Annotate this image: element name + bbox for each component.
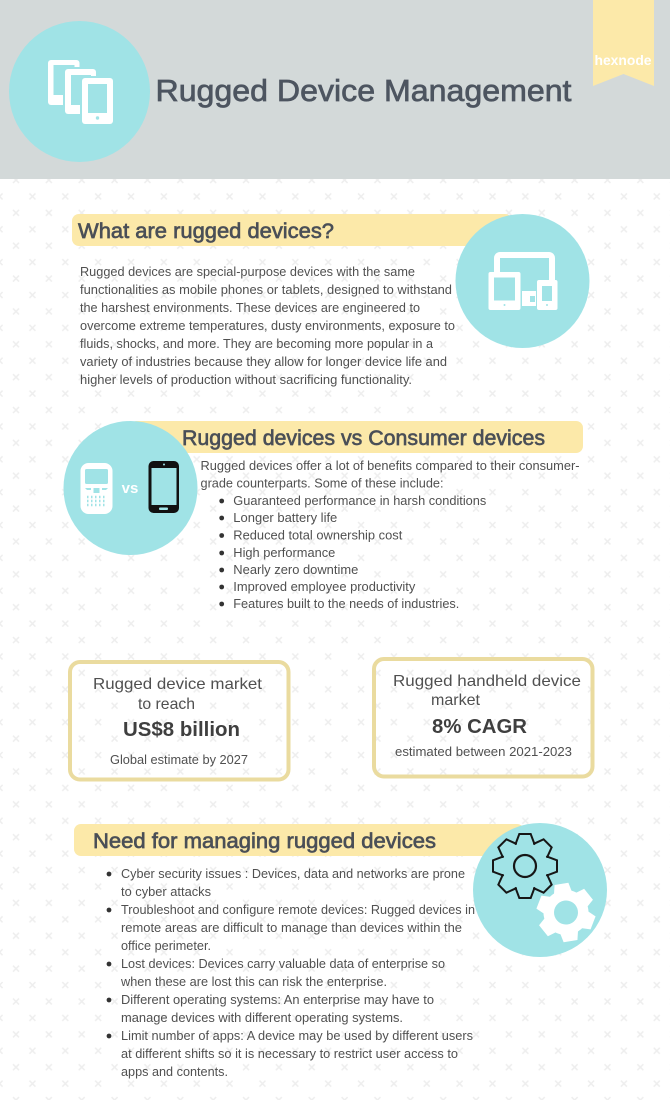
header banner bbox=[0, 0, 670, 179]
stat card: market size: to reach bbox=[138, 696, 195, 713]
list: benefits: Longer battery life bbox=[233, 510, 337, 525]
heading bar bbox=[74, 824, 524, 856]
list: reasons: at different shifts so it is necessary to restrict user access to bbox=[121, 1046, 458, 1061]
title: Rugged Device Management bbox=[156, 73, 572, 108]
section: what are rugged devices bbox=[72, 214, 590, 387]
list: benefits: Nearly zero downtime bbox=[233, 562, 358, 577]
paragraph: definition: overcome extreme temperatures, dusty environments, exposure to bbox=[80, 318, 455, 333]
list: benefits: Improved employee productivity bbox=[233, 579, 416, 594]
list: benefits: Reduced total ownership cost bbox=[233, 528, 403, 542]
stat card: CAGR bbox=[374, 659, 592, 776]
list: benefits bbox=[219, 493, 487, 611]
paragraph: definition: fluids, shocks, and more. They are becoming more popular in a bbox=[80, 336, 434, 351]
paragraph: benefits intro: Rugged devices offer a lot of benefits compared to their consumer- bbox=[200, 458, 580, 473]
list: reasons: Different operating systems: An enterprise may have to bbox=[121, 992, 434, 1007]
list: reasons: manage devices with different operating systems. bbox=[121, 1010, 403, 1025]
list: benefits: High performance bbox=[233, 545, 335, 560]
stat card: CAGR: estimated between 2021-2023 bbox=[395, 744, 572, 759]
list: benefits: Guaranteed performance in harsh conditions bbox=[233, 493, 487, 508]
paragraph: definition: higher levels of production without sacrificing functionality. bbox=[80, 372, 412, 387]
list: reasons: Lost devices: Devices carry valuable data of enterprise so bbox=[121, 956, 445, 971]
list: reasons: remote areas are difficult to manage than devices within the bbox=[121, 920, 462, 935]
heading text: Rugged devices vs Consumer devices bbox=[182, 427, 545, 450]
header circle with phones icon bbox=[9, 21, 150, 162]
paragraph: definition: the harshest environments. These devices are engineered to bbox=[80, 300, 420, 315]
list: reasons: apps and contents. bbox=[121, 1064, 228, 1079]
paragraph: benefits intro: grade counterparts. Some of these include: bbox=[200, 476, 444, 490]
list: reasons: to cyber attacks bbox=[121, 884, 211, 899]
stat card: market size: Global estimate by 2027 bbox=[110, 752, 248, 767]
stat card: market size: US$8 billion bbox=[123, 719, 240, 741]
icon: vs circle bbox=[64, 421, 198, 555]
list: reasons: office perimeter. bbox=[121, 938, 211, 953]
ribbon logo: hexnode bbox=[594, 52, 652, 68]
list: reasons bbox=[107, 866, 475, 1079]
paragraph: definition bbox=[80, 264, 455, 387]
heading bar: Need for managing rugged devices bbox=[93, 830, 436, 853]
stat card: market size bbox=[70, 662, 288, 780]
stat card: CAGR: Rugged handheld device bbox=[393, 673, 581, 690]
section: rugged vs consumer bbox=[64, 421, 583, 611]
paragraph: benefits intro bbox=[200, 458, 580, 490]
ribbon logo bbox=[593, 0, 654, 86]
list: benefits: Features built to the needs of industries. bbox=[233, 596, 459, 611]
paragraph: definition: functionalities as mobile phones or tablets, designed to withstand bbox=[80, 282, 452, 297]
section: need for managing bbox=[74, 823, 607, 1079]
paragraph: definition: Rugged devices are special-purpose devices with the same bbox=[80, 264, 415, 279]
icon: gears circle bbox=[473, 823, 607, 957]
stat card: CAGR: 8% CAGR bbox=[432, 716, 528, 738]
list: reasons: Limit number of apps: A device may be used by different users bbox=[121, 1028, 473, 1043]
list: reasons: Troubleshoot and configure remote devices: Rugged devices in bbox=[121, 902, 475, 917]
stat card: CAGR: market bbox=[431, 692, 481, 709]
heading bar bbox=[72, 214, 512, 246]
list: reasons: Cyber security issues : Devices, data and networks are prone bbox=[121, 866, 465, 881]
stat card: market size: Rugged device market bbox=[93, 676, 263, 693]
heading bar: What are rugged devices? bbox=[78, 220, 334, 243]
icon: vs circle: vs bbox=[122, 480, 138, 497]
list: reasons: when these are lost this can risk the enterprise. bbox=[120, 974, 387, 989]
paragraph: definition: variety of industries because they allow for longer device life and bbox=[80, 354, 447, 369]
heading bar bbox=[130, 421, 583, 453]
icon: devices circle bbox=[456, 214, 590, 348]
